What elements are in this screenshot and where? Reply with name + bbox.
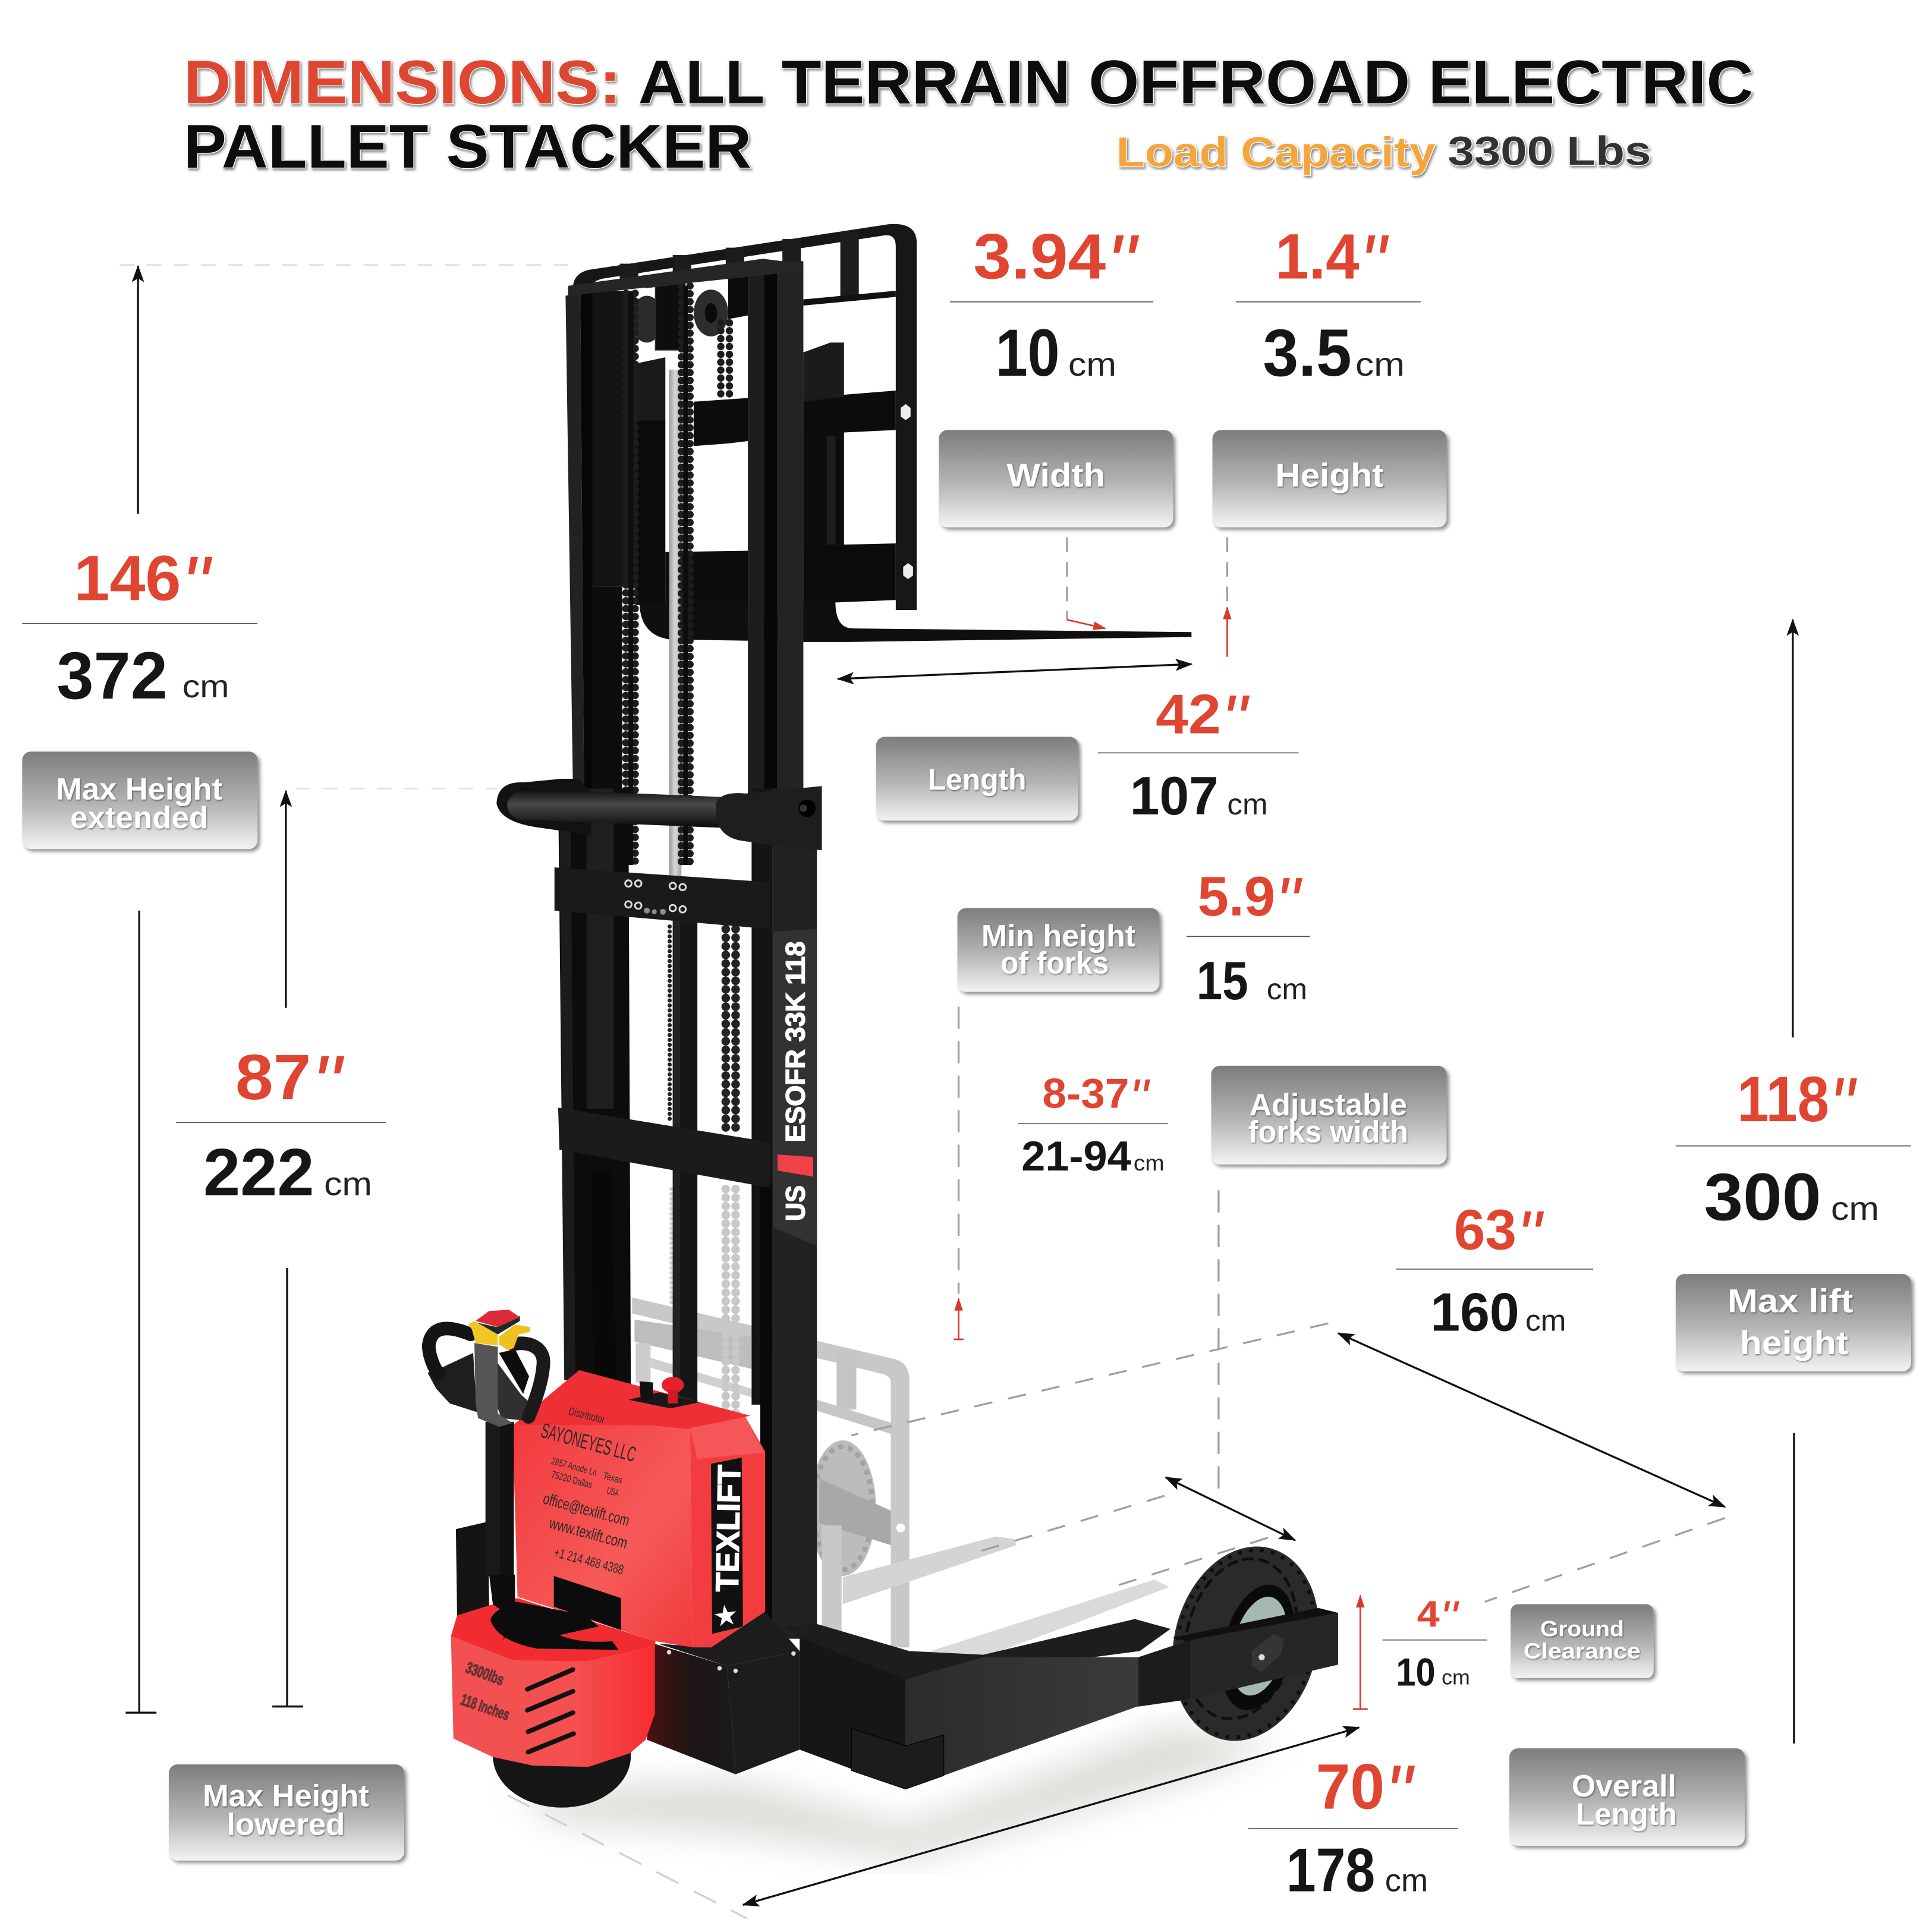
dimension: fork length 42 in: cm bbox=[1227, 788, 1268, 821]
label: length bbox=[876, 737, 1078, 820]
title: DIMENSIONS: bbox=[184, 48, 621, 117]
dimension: overall width 63 in: 160 bbox=[1430, 1282, 1519, 1343]
title bbox=[184, 48, 1753, 181]
dimension: fork width 3.94 in: cm bbox=[1068, 345, 1116, 383]
dimension: adjustable fork width: cm bbox=[1134, 1150, 1165, 1175]
label: max lift height: height bbox=[1740, 1324, 1848, 1361]
dimension: fork length 42 in: 42 bbox=[1156, 683, 1217, 745]
upper fork bbox=[640, 601, 1191, 642]
label: overall length: Overall bbox=[1572, 1769, 1676, 1803]
label: height: Height bbox=[1275, 457, 1384, 494]
dimension: max height extended 146 in: 372 bbox=[56, 638, 168, 713]
dimension: ground clearance 4 in: 10 bbox=[1396, 1650, 1436, 1694]
control panel: key and stop button bbox=[628, 1377, 700, 1408]
dimension: max lift 118 in: 118 bbox=[1738, 1063, 1840, 1135]
label: height bbox=[1213, 430, 1446, 527]
label: length: Length bbox=[928, 763, 1027, 797]
wheel bracket bbox=[1173, 1608, 1338, 1699]
model label on mast: ESOFR 33K 118 bbox=[780, 942, 810, 1142]
dimension: fork width 3.94 in: 3.94 bbox=[973, 220, 1098, 292]
control handle bbox=[427, 1310, 543, 1427]
dimension: max lift 118 in: cm bbox=[1831, 1190, 1879, 1227]
dimension: fork width 3.94 in: 10 bbox=[996, 316, 1060, 390]
dimension: fork height 1.4 in: " bbox=[1360, 218, 1389, 308]
tiller pivot bracket bbox=[489, 1575, 532, 1641]
title: PALLET STACKER bbox=[184, 112, 751, 181]
dimension: overall length 70 in bbox=[1248, 1748, 1458, 1905]
dimension: max height extended 146 in: cm bbox=[182, 669, 229, 704]
arrow: fork length bbox=[838, 664, 1191, 679]
label: min height of forks: Min height bbox=[981, 918, 1135, 953]
arrow: fork height pointer bbox=[1226, 537, 1228, 657]
label: max height extended: extended bbox=[70, 800, 208, 835]
arrow: fork width pointer bbox=[1067, 537, 1105, 628]
label: ground clearance: Ground bbox=[1540, 1616, 1624, 1641]
side logo panel: TEXLIFT bbox=[710, 1465, 747, 1592]
model label on mast: US bbox=[780, 1185, 810, 1221]
arrow: ground clearance bbox=[1353, 1596, 1368, 1709]
rear wheel bbox=[493, 1704, 631, 1808]
mast bbox=[558, 259, 817, 1639]
label: overall length: Length bbox=[1576, 1797, 1677, 1832]
arrow: max height extended lower bbox=[125, 911, 156, 1713]
label: max height lowered: lowered bbox=[226, 1807, 345, 1841]
dimension: fork width 3.94 in: " bbox=[1106, 218, 1140, 308]
label: adjustable forks width: Adjustable bbox=[1250, 1087, 1407, 1122]
backrest bbox=[573, 224, 917, 610]
dimension: ground clearance 4 in: " bbox=[1440, 1593, 1460, 1644]
dimension: min fork height 5.9 in: " bbox=[1275, 863, 1302, 941]
dimension: overall length 70 in: " bbox=[1385, 1748, 1415, 1838]
dimension: min fork height 5.9 in: 5.9 bbox=[1198, 866, 1275, 927]
distributor text on housing: Texas bbox=[602, 1470, 624, 1486]
tiller column bbox=[486, 1422, 514, 1576]
center lift rod bbox=[669, 370, 681, 881]
dimension: fork height 1.4 in: 3.5 bbox=[1263, 316, 1352, 390]
label: min height of forks bbox=[957, 908, 1159, 992]
dimension: ground clearance 4 in bbox=[1383, 1593, 1487, 1694]
label: width: Width bbox=[1006, 457, 1105, 494]
distributor text on housing: 2857 Anode Ln bbox=[550, 1455, 598, 1478]
dimension: overall width 63 in bbox=[1396, 1197, 1593, 1343]
arrow: max lift height upper bbox=[1792, 620, 1793, 1037]
label: width bbox=[939, 430, 1173, 527]
dimension: ground clearance 4 in: 4 bbox=[1417, 1594, 1437, 1635]
front wheel bbox=[1153, 1531, 1339, 1757]
label: adjustable forks width bbox=[1211, 1066, 1446, 1165]
label: max height lowered bbox=[169, 1764, 404, 1861]
dimension: overall length 70 in: 70 bbox=[1316, 1751, 1387, 1823]
ghost lowered carriage bbox=[632, 1298, 1169, 1656]
distributor text on housing: 75220 Dallas bbox=[550, 1469, 593, 1490]
lower red cover: 3300lbs bbox=[463, 1659, 506, 1689]
battery box bbox=[647, 1612, 800, 1774]
dimension: fork length 42 in: 107 bbox=[1130, 766, 1219, 826]
label: max height extended: Max Height bbox=[56, 772, 222, 806]
distributor text on housing bbox=[539, 1405, 638, 1578]
floor shadow bbox=[518, 1725, 1282, 1861]
dimension: fork length 42 in bbox=[1098, 681, 1299, 826]
dimension: fork height 1.4 in bbox=[1236, 218, 1421, 390]
arrow: max height extended upper bbox=[119, 265, 579, 514]
pulleys bbox=[631, 280, 728, 350]
fork carriage bbox=[593, 269, 913, 606]
dimension: max height lowered 87 in: cm bbox=[324, 1165, 372, 1203]
black base frame bbox=[785, 1619, 1190, 1789]
dimension: max height extended 146 in: " bbox=[181, 540, 213, 630]
arrow: adjustable forks span bbox=[1166, 1477, 1295, 1540]
dimension: fork length 42 in: " bbox=[1221, 681, 1250, 759]
dimension: overall width 63 in: " bbox=[1516, 1197, 1544, 1276]
dimension: overall width 63 in: cm bbox=[1525, 1304, 1566, 1338]
side logo panel: ★ bbox=[711, 1599, 741, 1634]
label: max height lowered: Max Height bbox=[203, 1779, 369, 1813]
label: ground clearance: Clearance bbox=[1524, 1638, 1641, 1663]
dimension: max lift 118 in bbox=[1676, 1061, 1911, 1234]
arrow: max lift height lower bbox=[1793, 1433, 1795, 1744]
dimension: min fork height 5.9 in: cm bbox=[1267, 973, 1307, 1006]
dimension: max height lowered 87 in: 87 bbox=[235, 1041, 307, 1113]
dimension: adjustable fork width: 21-94 bbox=[1021, 1132, 1131, 1179]
dimension: overall length 70 in: cm bbox=[1385, 1863, 1428, 1899]
label: max height extended bbox=[22, 751, 257, 849]
load capacity subtitle bbox=[1116, 128, 1651, 175]
dimension: max height extended 146 in: 146 bbox=[74, 542, 181, 613]
arrow: overall length bbox=[743, 1728, 1359, 1905]
dimension: min fork height 5.9 in: 15 bbox=[1197, 951, 1248, 1011]
dimension: max height lowered 87 in bbox=[176, 1039, 386, 1210]
distributor text on housing: USA bbox=[606, 1485, 621, 1499]
distributor text on housing: www.texlift.com bbox=[547, 1514, 630, 1552]
dimension: max height lowered 87 in: 222 bbox=[203, 1135, 314, 1210]
load capacity subtitle: Load Capacity bbox=[1116, 128, 1436, 175]
mast crossbars bbox=[555, 867, 770, 1188]
dashed floor guides bbox=[508, 1323, 1725, 1918]
arrow: max height lowered upper bbox=[286, 789, 498, 1008]
dimension: max height lowered 87 in: " bbox=[311, 1039, 345, 1128]
arrow: overall width bbox=[1338, 1333, 1725, 1507]
title: ALL TERRAIN OFFROAD ELECTRIC bbox=[638, 48, 1753, 117]
label: adjustable forks width: forks width bbox=[1248, 1114, 1408, 1148]
dimension: max lift 118 in: " bbox=[1829, 1061, 1857, 1150]
model label on mast bbox=[773, 929, 817, 1246]
arrow: min height of forks bbox=[954, 1006, 964, 1339]
dimension: min fork height 5.9 in bbox=[1187, 863, 1310, 1011]
lower red cover bbox=[451, 1598, 656, 1767]
dimension: adjustable fork width: 8-37 bbox=[1043, 1069, 1127, 1116]
distributor text on housing: SAYONEYES LLC bbox=[539, 1419, 638, 1467]
label: min height of forks: of forks bbox=[1000, 945, 1109, 980]
dimension: fork height 1.4 in: cm bbox=[1355, 345, 1405, 383]
top handle bar bbox=[496, 779, 822, 850]
lower red cover: 118 Inches bbox=[458, 1691, 512, 1724]
dimension: overall width 63 in: 63 bbox=[1454, 1199, 1517, 1262]
dimension: max height extended 146 in bbox=[22, 540, 257, 713]
lift chains bbox=[626, 286, 735, 1414]
dimension: adjustable fork width: " bbox=[1129, 1068, 1151, 1127]
dimension: overall length 70 in: 178 bbox=[1286, 1836, 1375, 1905]
arrow: max height lowered lower bbox=[272, 1268, 303, 1707]
dimension: ground clearance 4 in: cm bbox=[1442, 1666, 1470, 1689]
dimension: max lift 118 in: 300 bbox=[1704, 1160, 1821, 1234]
dimension: fork height 1.4 in: 1.4 bbox=[1275, 220, 1364, 292]
label: overall length bbox=[1509, 1748, 1745, 1846]
dimension: adjustable fork width bbox=[1018, 1068, 1168, 1179]
label: ground clearance bbox=[1511, 1604, 1654, 1678]
distributor text on housing: +1 214 468 4388 bbox=[552, 1544, 625, 1578]
label: max lift height bbox=[1676, 1274, 1911, 1371]
distributor text on housing: office@texlift.com bbox=[541, 1490, 631, 1530]
dimension: fork width 3.94 in bbox=[950, 218, 1153, 390]
label: max lift height: Max lift bbox=[1728, 1282, 1853, 1319]
rear black panel bbox=[456, 1522, 489, 1616]
load capacity subtitle: 3300 Lbs bbox=[1448, 129, 1651, 174]
red motor housing bbox=[512, 1370, 765, 1647]
distributor text on housing: Distributor bbox=[568, 1405, 606, 1426]
dashed: adjustable fork width bbox=[1218, 1190, 1219, 1493]
